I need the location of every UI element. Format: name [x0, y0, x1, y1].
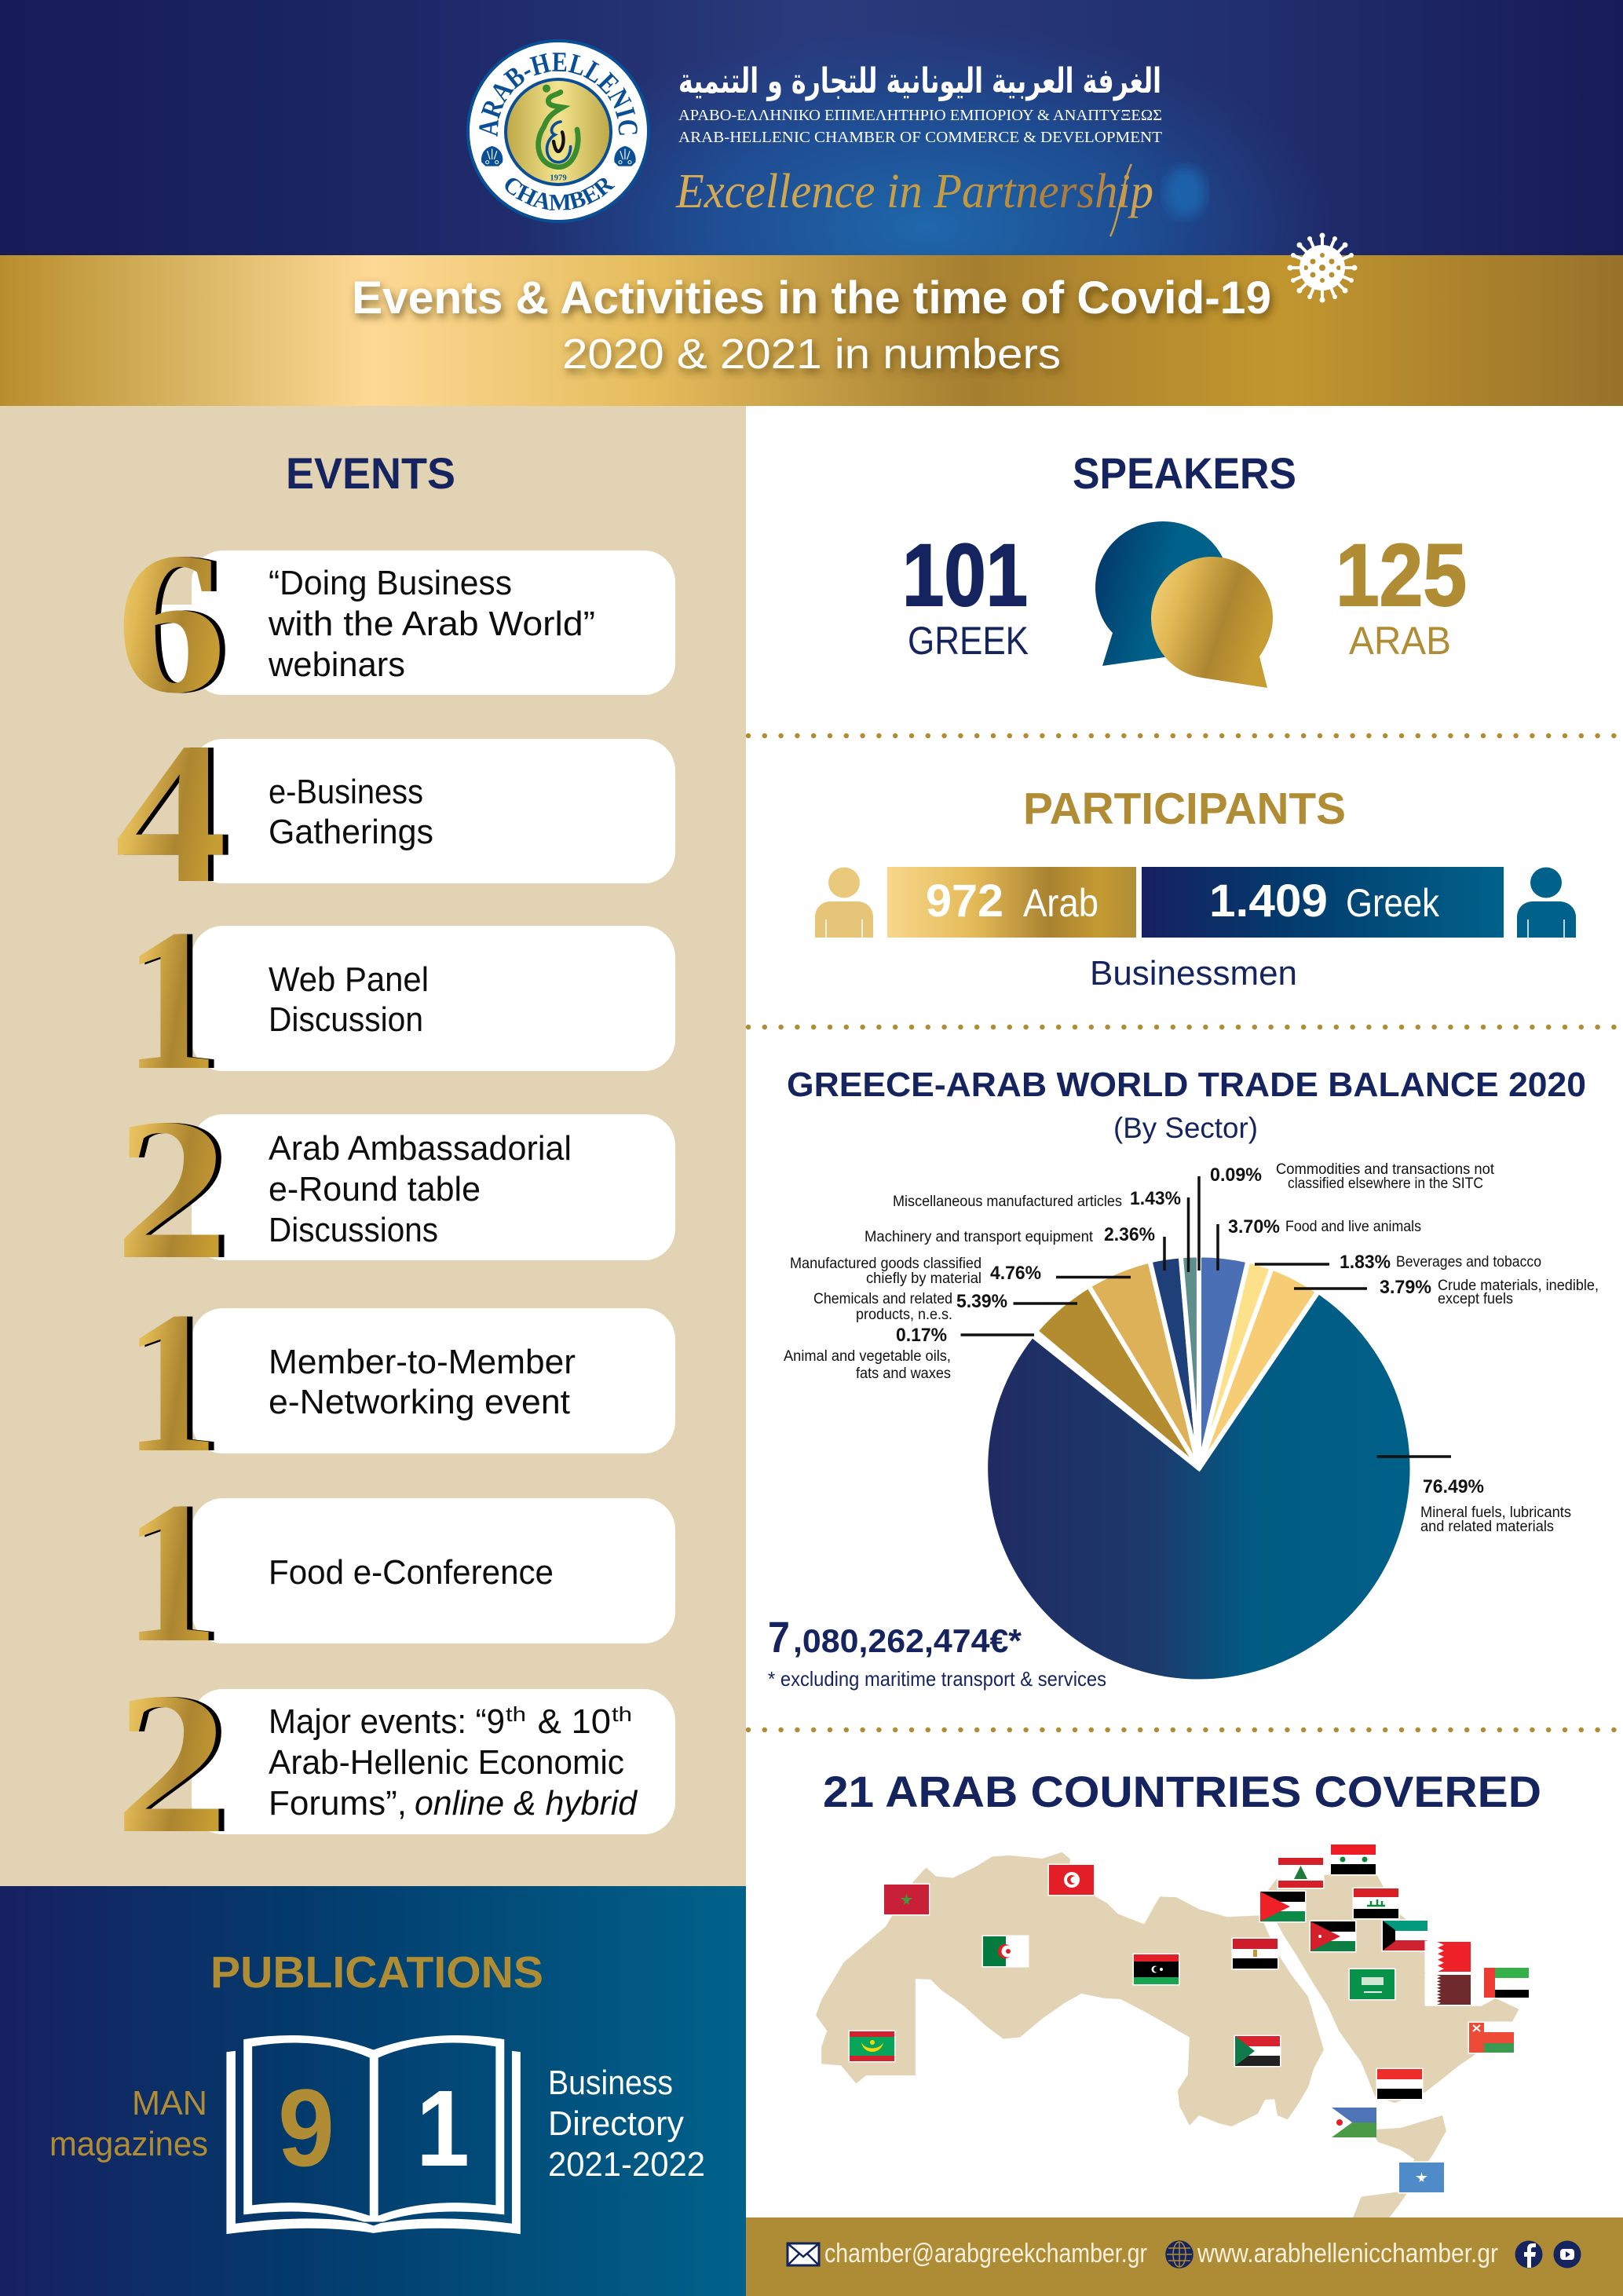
icon: gold person	[815, 867, 873, 938]
flag: Sudan	[1234, 2035, 1281, 2067]
event: 1 member networking: 1	[130, 1270, 224, 1494]
icon: youtube	[1553, 2241, 1581, 2268]
website address: www.arabhellenicchamber.gr	[1197, 2239, 1498, 2269]
chamber name in three languages: ΑΡΑΒΟ-ΕΛΛΗΝΙΚΟ ΕΠΙΜΕΛΗΤΗΡΙΟ ΕΜΠΟΡΙΟΥ & ΑΝΑΠΤΥΞΕΩΣ	[678, 107, 1162, 124]
label: Business Directory 2021-2022: Directory	[548, 2104, 684, 2143]
chamber name in three languages: ARAB-HELLENIC CHAMBER OF COMMERCE & DEVELOPMENT	[678, 129, 1162, 146]
panel: countries covered	[816, 1767, 1541, 2218]
title	[352, 272, 1271, 378]
label: oils 0.17%: 0.17%	[896, 1325, 947, 1346]
flag: Yemen	[1376, 2068, 1423, 2100]
event: 2 major forums: 2	[115, 1651, 228, 1875]
flag: Saudi Arabia	[1349, 1968, 1396, 2001]
panel: trade balance	[768, 1066, 1599, 1691]
event: 6 webinars: with the Arab World”	[268, 605, 595, 643]
event: 4 e-Business gatherings: 4	[120, 700, 232, 925]
label: commodities 0.09%: classified elsewhere in the SITC	[1288, 1175, 1483, 1192]
heading: events: EVENTS	[286, 448, 455, 498]
heading: countries: 21 ARAB COUNTRIES COVERED	[823, 1767, 1541, 1816]
label: MAN magazines	[49, 2084, 208, 2163]
label: crude 3.79%: except fuels	[1438, 1291, 1513, 1307]
icon: globe	[1167, 2241, 1192, 2268]
label: crude 3.79%: 3.79%	[1380, 1277, 1431, 1298]
icon: coronavirus	[1288, 232, 1357, 303]
event: 1 food conference: Food e-Conference	[269, 1553, 554, 1592]
map: Arab world	[816, 1852, 1519, 2218]
heading: speakers: SPEAKERS	[1073, 448, 1296, 498]
heading: publications: PUBLICATIONS	[210, 1947, 543, 1998]
stat: 125 Arab: 125	[1336, 526, 1467, 624]
event: 1 member networking	[124, 1270, 675, 1494]
stat: 101 Greek: GREEK	[908, 619, 1029, 663]
flag: Libya	[1132, 1954, 1179, 1985]
total trade value	[768, 1612, 1022, 1662]
gold title band	[0, 255, 1623, 406]
email address: chamber@arabgreekchamber.gr	[824, 2239, 1147, 2269]
label: oils 0.17%	[784, 1325, 951, 1382]
event: 1 web panel discussion: 1	[130, 887, 224, 1112]
event: 2 ambassadorial round tables	[115, 1077, 675, 1301]
label: MAN magazines: MAN	[132, 2084, 207, 2122]
panel: events	[0, 406, 746, 1886]
panel: participants	[815, 784, 1576, 993]
icon: facebook	[1515, 2241, 1542, 2268]
event: 2 ambassadorial round tables: Discussions	[269, 1211, 438, 1249]
logo: Arab-Hellenic Chamber seal	[466, 39, 650, 223]
event: 2 major forums: 2	[120, 1651, 234, 1875]
event: 1 food conference	[124, 1460, 675, 1684]
slogan: Excellence in Partnership: Excellence in Partnership	[675, 165, 1153, 218]
label: food 3.70%	[1228, 1216, 1421, 1238]
icon: envelope	[788, 2243, 819, 2265]
label: Business Directory 2021-2022: Business	[548, 2064, 673, 2102]
flag: Syria	[1330, 1844, 1377, 1875]
event: 2 ambassadorial round tables: 2	[120, 1077, 234, 1301]
flag: Oman	[1468, 2021, 1515, 2054]
event: 1 web panel discussion	[124, 887, 675, 1112]
event: 6 webinars: webinars	[268, 645, 405, 684]
label: Businessmen: Businessmen	[1090, 954, 1297, 993]
logo: Arab-Hellenic Chamber seal: 1979	[550, 174, 567, 182]
event: 2 major forums	[115, 1651, 675, 1875]
total trade value: 7	[768, 1612, 790, 1662]
event: 1 food conference: 1	[124, 1460, 218, 1684]
bar: 972 Arab: Arab	[1023, 881, 1098, 925]
chamber name in three languages	[678, 61, 1162, 146]
bar: 972 Arab	[887, 867, 1136, 938]
icon: open book	[226, 2035, 521, 2234]
flag: Morocco	[883, 1883, 930, 1916]
stat: 101 Greek: 101	[902, 526, 1028, 624]
icon: blue person	[1517, 867, 1576, 938]
event: 4 e-Business gatherings: e-Business	[269, 773, 423, 811]
label: oils 0.17%: fats and waxes	[856, 1366, 951, 1382]
label: manufactured 4.76%: 4.76%	[990, 1263, 1041, 1284]
label: manufactured 4.76%	[790, 1256, 1041, 1287]
flag: Bahrain	[1424, 1941, 1471, 1972]
label: chemicals 5.39%: Chemicals and related	[813, 1291, 952, 1307]
bar: 972 Arab: 972	[926, 876, 1003, 927]
label: mineral fuels 76.49%	[1420, 1476, 1571, 1535]
flag: Lebanon	[1277, 1856, 1324, 1889]
logo: Arab-Hellenic Chamber seal: CHAMBER	[506, 177, 616, 210]
label: oils 0.17%: Animal and vegetable oils,	[784, 1348, 951, 1365]
bar: 1.409 Greek: Greek	[1346, 881, 1440, 925]
label: commodities 0.09%	[1210, 1161, 1495, 1192]
event: 1 member networking: Member-to-Member	[269, 1343, 576, 1381]
label: chemicals 5.39%: products, n.e.s.	[856, 1307, 952, 1323]
event: 4 e-Business gatherings: 4	[115, 700, 227, 925]
icon: speech bubbles	[1095, 521, 1273, 688]
subheading: by sector: (By Sector)	[1113, 1112, 1258, 1144]
event: 6 webinars: 6	[116, 510, 226, 735]
event: 1 web panel discussion: 1	[124, 887, 218, 1112]
label: mineral fuels 76.49%: Mineral fuels, lubricants	[1420, 1504, 1571, 1521]
label: crude 3.79%	[1380, 1277, 1599, 1307]
label: crude 3.79%: Crude materials, inedible,	[1438, 1278, 1599, 1294]
footnote: * excluding maritime transport & services	[768, 1667, 1106, 1691]
event: 2 ambassadorial round tables: e-Round table	[269, 1170, 481, 1208]
heading: trade balance: GREECE-ARAB WORLD TRADE BALANCE 2020	[787, 1066, 1586, 1104]
event: 4 e-Business gatherings: Gatherings	[269, 813, 433, 851]
flag: Jordan	[1310, 1921, 1357, 1952]
logo: Arab-Hellenic Chamber seal: ARAB-HELLENIC	[479, 53, 638, 137]
label: mineral fuels 76.49%: 76.49%	[1423, 1476, 1484, 1497]
label: manufactured 4.76%: Manufactured goods classified	[790, 1256, 981, 1272]
event: 2 ambassadorial round tables: Arab Ambassadorial	[269, 1129, 572, 1168]
label: chemicals 5.39%: 5.39%	[956, 1291, 1007, 1312]
event: 2 major forums: online & hybrid	[415, 1784, 638, 1823]
leader lines	[961, 1176, 1451, 1457]
event: 6 webinars: 6	[122, 510, 232, 735]
event: 1 member networking: e-Networking event	[269, 1383, 570, 1421]
event: 1 food conference: 1	[130, 1460, 224, 1684]
flag: Qatar	[1424, 1974, 1471, 2005]
flag: Kuwait	[1382, 1919, 1429, 1952]
label: Business Directory 2021-2022: 2021-2022	[548, 2145, 705, 2184]
event: 1 web panel discussion: Discussion	[269, 1000, 423, 1039]
flag: Egypt	[1231, 1938, 1278, 1969]
bar: 1.409 Greek: 1.409	[1209, 876, 1328, 927]
panel: speakers	[902, 448, 1467, 688]
label: beverages 1.83%: Beverages and tobacco	[1396, 1254, 1541, 1270]
count: 9 magazines: 9	[278, 2066, 334, 2189]
chamber name in three languages: الغرفة العربية اليونانية للتجارة و التنمية	[678, 61, 1161, 101]
flag: Somalia	[1398, 2161, 1445, 2194]
event: 2 major forums: th	[506, 1702, 526, 1726]
label: miscellaneous 1.43%: Miscellaneous manufactured articles	[893, 1194, 1122, 1210]
label: mineral fuels 76.49%: and related materials	[1420, 1519, 1554, 1535]
label: food 3.70%: Food and live animals	[1285, 1219, 1421, 1235]
label: machinery 2.36%	[865, 1224, 1155, 1245]
title: Events & Activities in the time of Covid-19	[352, 272, 1271, 324]
pie chart	[985, 1255, 1413, 1681]
label: machinery 2.36%: 2.36%	[1104, 1224, 1155, 1245]
heading: participants: PARTICIPANTS	[1023, 784, 1346, 834]
flag: Tunisia	[1047, 1864, 1095, 1896]
label: food 3.70%: 3.70%	[1228, 1216, 1280, 1238]
label: MAN magazines: magazines	[49, 2125, 208, 2163]
event: 2 major forums: Major events: “9	[269, 1702, 505, 1741]
flag: Djibouti	[1332, 2108, 1376, 2137]
event: 2 major forums: th	[612, 1702, 632, 1726]
flag: Palestine	[1259, 1891, 1307, 1922]
header band	[0, 0, 1623, 255]
event: 4 e-Business gatherings	[115, 700, 675, 925]
label: machinery 2.36%: Machinery and transport equipment	[865, 1229, 1094, 1245]
label: chemicals 5.39%	[813, 1291, 1007, 1323]
stat: 125 Arab	[1336, 526, 1467, 663]
event: 6 webinars	[116, 510, 675, 735]
label: commodities 0.09%: Commodities and transactions not	[1276, 1161, 1495, 1178]
event: 1 member networking: 1	[124, 1270, 218, 1494]
label: commodities 0.09%: 0.09%	[1210, 1164, 1262, 1186]
flag: Algeria	[981, 1935, 1029, 1968]
event: 1 web panel discussion: Web Panel	[269, 960, 429, 999]
stat: 125 Arab: ARAB	[1349, 619, 1451, 663]
flag: Iraq	[1352, 1888, 1399, 1919]
event: 2 major forums: & 10	[528, 1702, 611, 1741]
panel: publications	[0, 1886, 746, 2296]
event: 2 ambassadorial round tables: 2	[115, 1077, 228, 1301]
count: 1 directory: 1	[416, 2068, 470, 2189]
footer	[746, 2217, 1623, 2296]
event: 2 major forums: Arab-Hellenic Economic	[269, 1743, 624, 1782]
event: 6 webinars: “Doing Business	[269, 564, 512, 602]
label: manufactured 4.76%: chiefly by material	[866, 1270, 981, 1287]
label: miscellaneous 1.43%: 1.43%	[1130, 1188, 1181, 1209]
total trade value: ,080,262,474€*	[793, 1622, 1022, 1659]
label: miscellaneous 1.43%	[893, 1188, 1181, 1210]
bar: 1.409 Greek	[1142, 867, 1504, 938]
flag: UAE	[1482, 1966, 1530, 1999]
flag: Mauritania	[848, 2031, 895, 2062]
label: beverages 1.83%	[1340, 1252, 1541, 1273]
label: Business Directory 2021-2022	[548, 2064, 705, 2184]
stat: 101 Greek	[902, 526, 1029, 663]
label: beverages 1.83%: 1.83%	[1340, 1252, 1391, 1273]
event: 2 major forums: Forums”,	[269, 1784, 407, 1823]
title: 2020 & 2021 in numbers	[562, 331, 1061, 378]
